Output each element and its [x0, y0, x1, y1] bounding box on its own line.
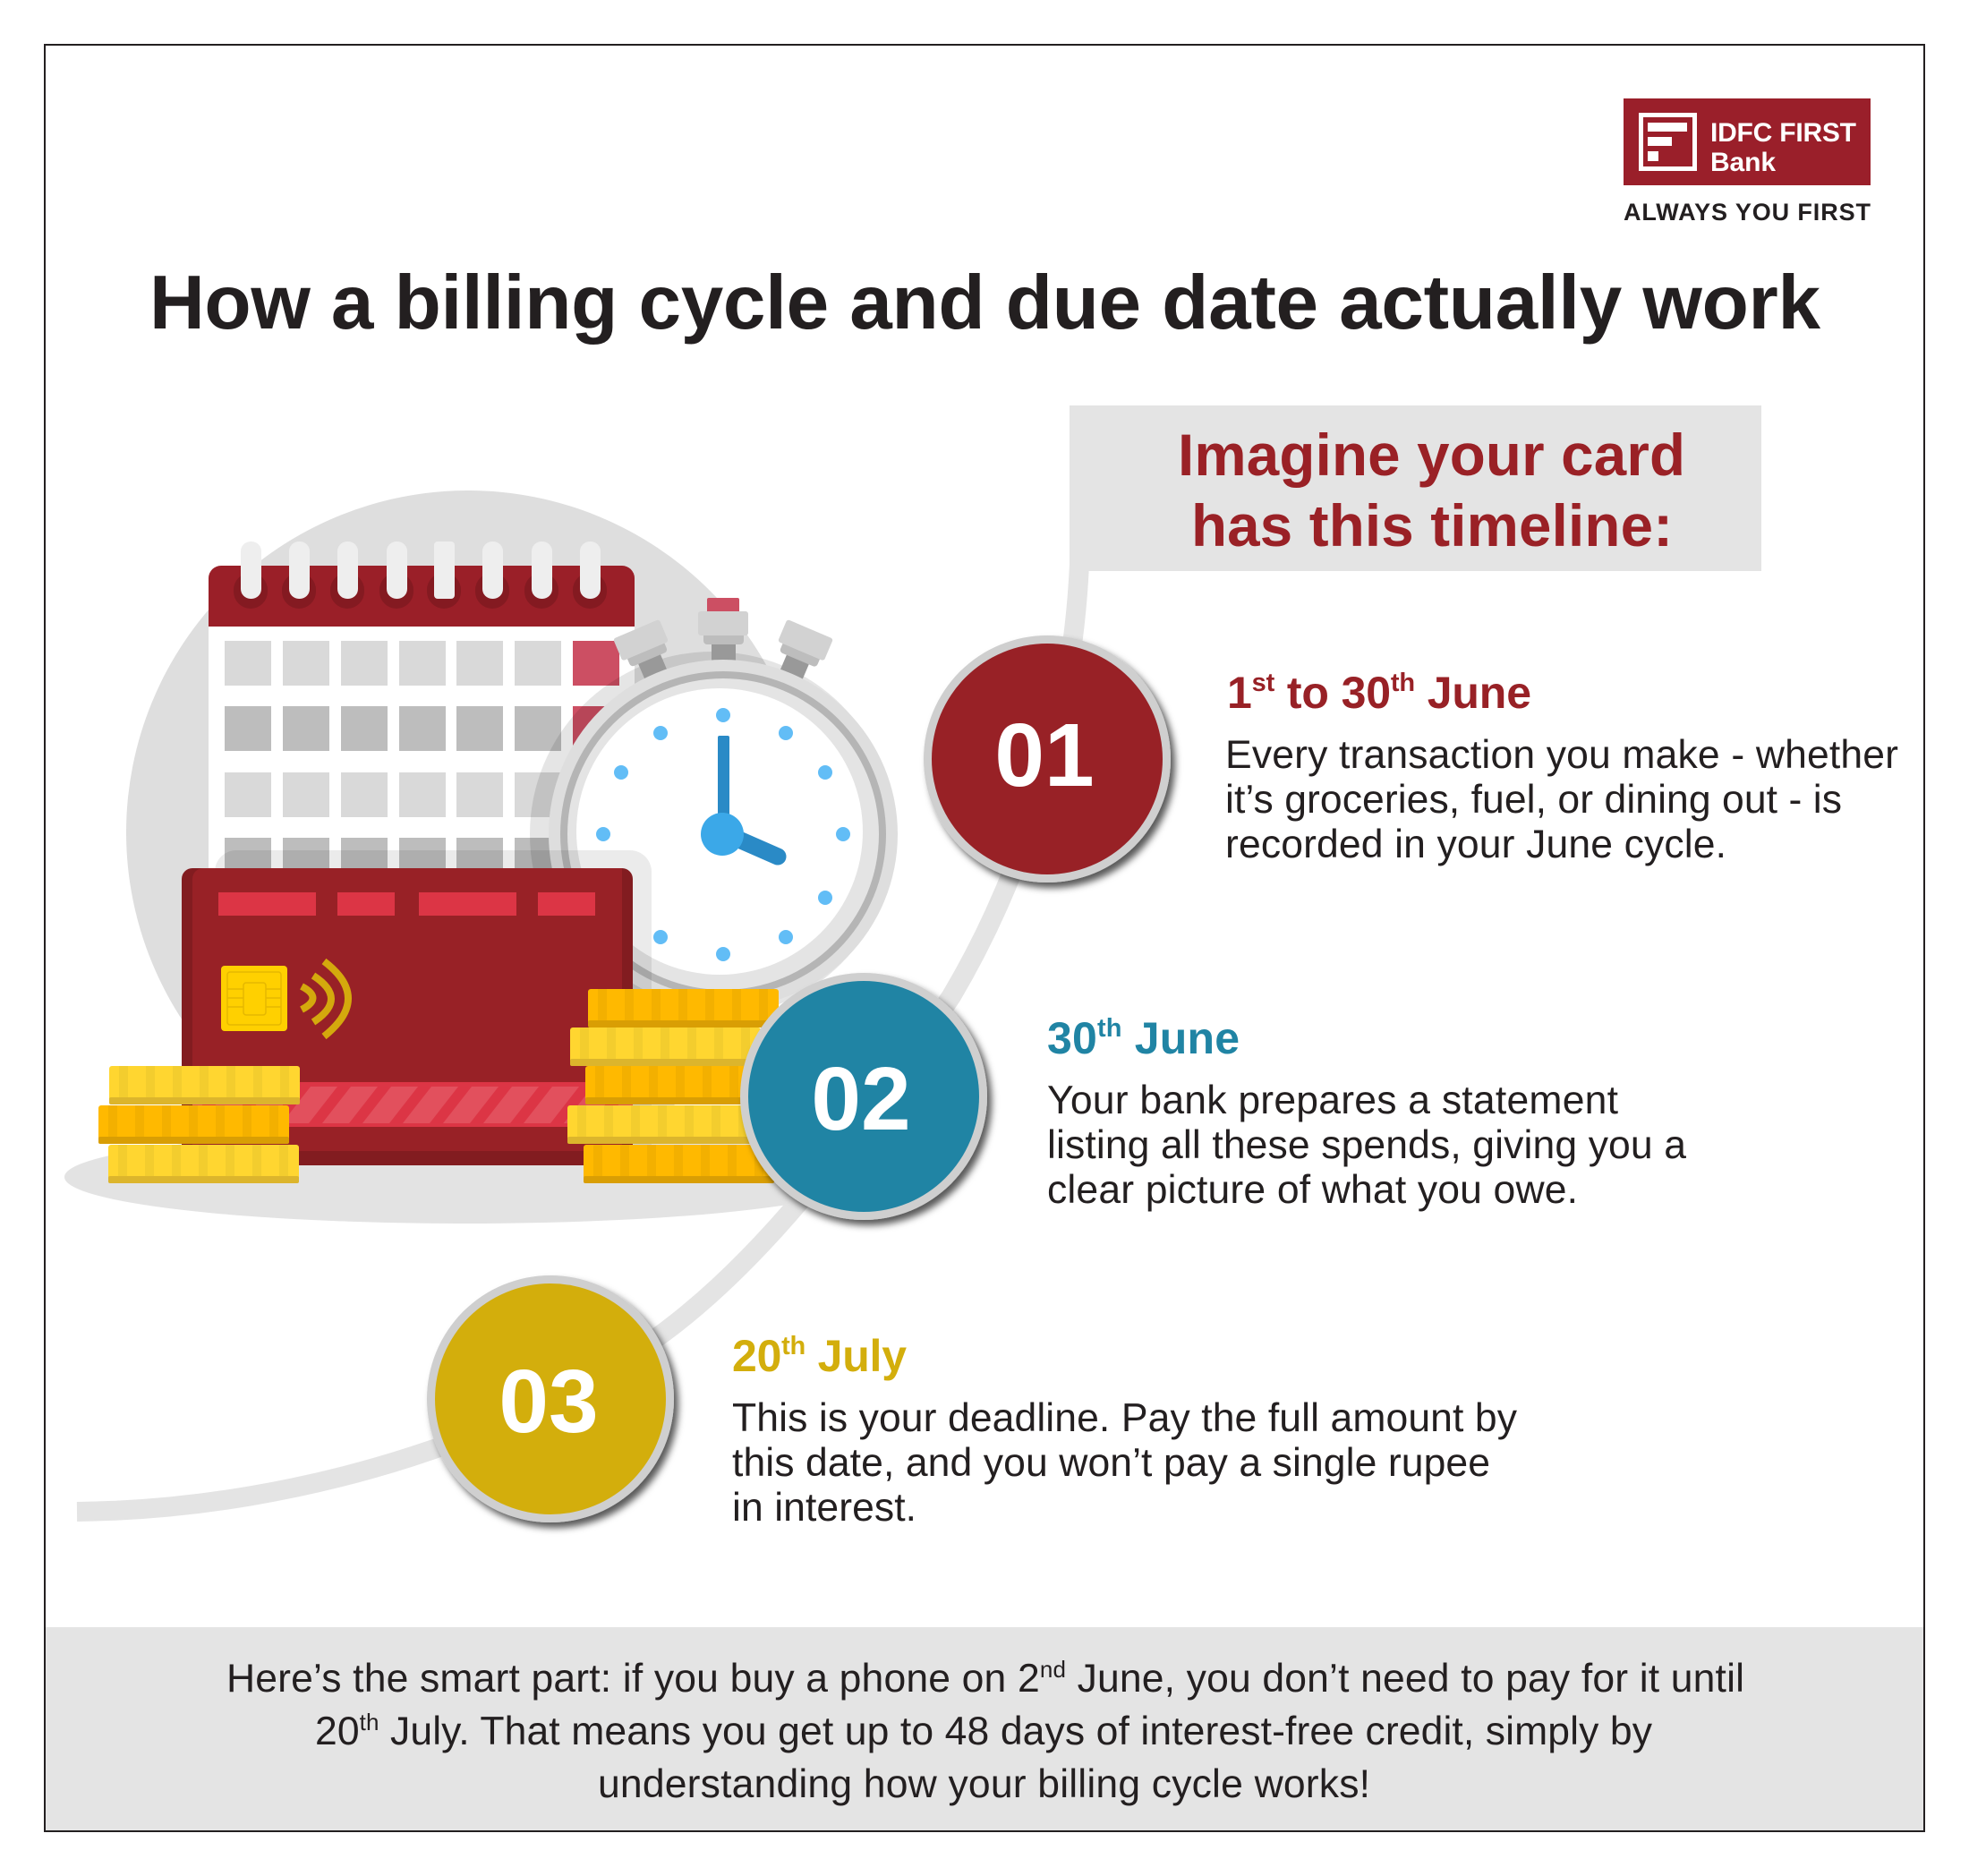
step 03 text: This is your deadline. Pay the full amount by — [732, 1396, 1518, 1440]
step 02 text: Your bank prepares a statement — [1047, 1079, 1619, 1122]
callout: imagine your card — [1070, 405, 1761, 571]
icon: credit card — [182, 850, 652, 1165]
logo: Bank — [1710, 148, 1776, 177]
step 01 text: to 30 — [1274, 668, 1391, 718]
ground shadow — [64, 1130, 866, 1224]
footer text: 20 — [315, 1710, 360, 1753]
step 02 badge — [740, 973, 987, 1220]
step 02 badge: 02 — [811, 1049, 911, 1149]
footer text: th — [360, 1709, 379, 1735]
step 01 text: 1 — [1227, 668, 1252, 718]
timeline swoosh — [77, 564, 1079, 1512]
chip — [221, 966, 287, 1031]
step 01 text: Every transaction you make - whether — [1225, 733, 1898, 777]
title: How a billing cycle and due date actually work — [149, 260, 1820, 345]
illustration: calendar, clock, card and coins — [64, 490, 898, 1224]
magnetic stripe — [192, 1082, 633, 1127]
step 02 text: June — [1122, 1013, 1240, 1063]
footer text: nd — [1040, 1656, 1066, 1683]
logo — [1624, 98, 1871, 226]
icon: calendar — [209, 541, 635, 886]
logo: ALWAYS YOU FIRST — [1624, 199, 1871, 226]
step 03 text: July — [806, 1331, 907, 1381]
step 03 text: 20 — [732, 1331, 781, 1381]
step 03 text: this date, and you won’t pay a single rupee — [732, 1441, 1490, 1485]
step 03 text: in interest. — [732, 1486, 916, 1530]
icon: stopwatch — [530, 598, 898, 1017]
step 03 badge — [427, 1275, 674, 1522]
step 01 text: June — [1415, 668, 1531, 718]
step 02 text: listing all these spends, giving you a — [1047, 1123, 1686, 1167]
step 02 text: 30 — [1047, 1013, 1097, 1063]
step 01 badge — [924, 635, 1171, 883]
step 03 text — [732, 1331, 1518, 1530]
step 01 text: it’s groceries, fuel, or dining out - is — [1225, 778, 1842, 822]
coins: left stack — [98, 1066, 300, 1183]
step 01 text: th — [1391, 669, 1415, 697]
callout: imagine your card: has this timeline: — [1191, 493, 1673, 559]
coins: right stack — [567, 989, 779, 1183]
step 02 text — [1047, 1013, 1686, 1212]
background circle — [126, 490, 810, 1174]
step 02 text: th — [1097, 1014, 1122, 1043]
step 03 badge: 03 — [499, 1352, 599, 1452]
footer text: understanding how your billing cycle works! — [598, 1762, 1370, 1806]
logo: IDFC FIRST — [1710, 118, 1856, 148]
step 03 text: th — [781, 1332, 806, 1360]
step 01 text: st — [1252, 669, 1275, 697]
step 01 text: recorded in your June cycle. — [1225, 823, 1726, 866]
step 01 text — [1225, 668, 1898, 866]
contactless waves — [302, 961, 348, 1036]
footer text: Here’s the smart part: if you buy a phone on 2 — [226, 1657, 1040, 1701]
step 02 text: clear picture of what you owe. — [1047, 1168, 1578, 1212]
footer band — [46, 1627, 1923, 1830]
footer text: June, you don’t need to pay for it until — [1066, 1657, 1744, 1701]
footer text: July. That means you get up to 48 days of interest-free credit, simply by — [379, 1710, 1653, 1753]
footer text — [226, 1656, 1744, 1806]
step 01 badge: 01 — [994, 705, 1095, 806]
callout: imagine your card: Imagine your card — [1178, 422, 1685, 488]
